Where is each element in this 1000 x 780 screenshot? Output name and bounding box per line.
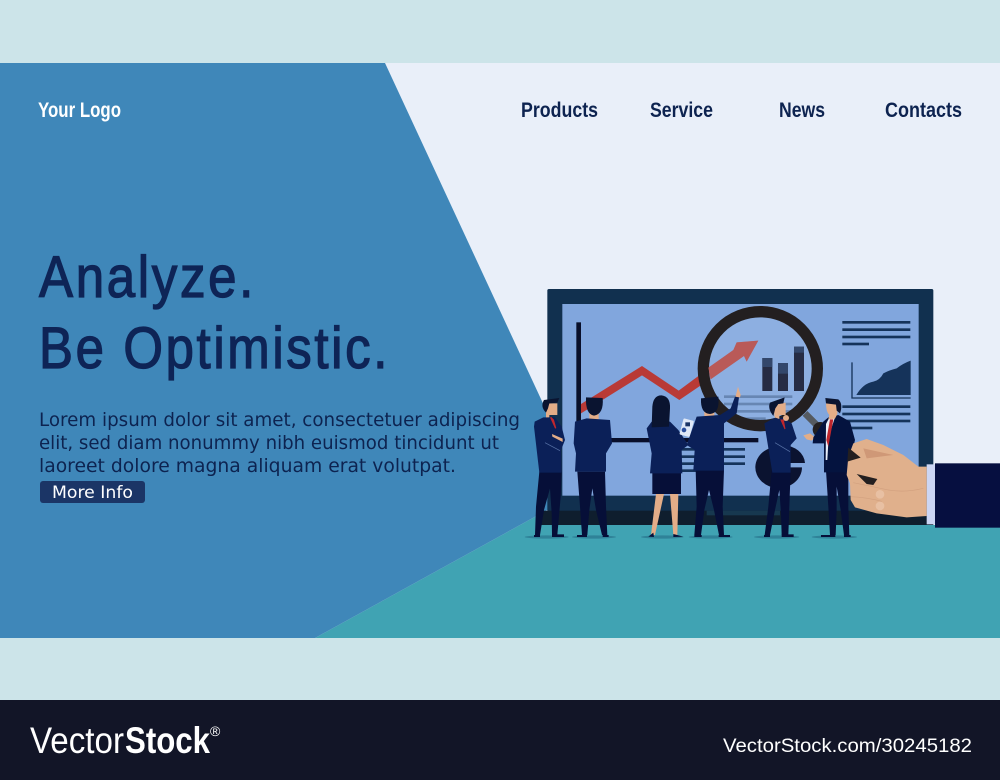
- illustration: [525, 289, 1000, 539]
- body paragraph: Lorem ipsum dolor sit amet, consectetuer adipiscing: [39, 409, 520, 431]
- area chart: [852, 361, 911, 398]
- navigation menu: Products: [521, 98, 598, 122]
- body paragraph: laoreet dolore magna aliquam erat volutpat.: [39, 455, 456, 477]
- text lines lower: [680, 448, 745, 472]
- headline: Analyze.: [39, 245, 256, 310]
- text lines right: [842, 405, 910, 429]
- top band: [0, 0, 1000, 63]
- person 1: [525, 398, 569, 539]
- pie chart: [755, 445, 805, 488]
- bars inside lens: [762, 347, 804, 391]
- navigation menu: Contacts: [885, 98, 962, 122]
- hand holding magnifier: [847, 439, 1000, 528]
- presentation monitor: [540, 289, 933, 525]
- magnifying glass: [703, 312, 828, 437]
- more info button: More Info: [52, 483, 133, 503]
- footer bar: Stock: [125, 720, 210, 761]
- text lines centre: [724, 395, 792, 420]
- more info button: [40, 481, 145, 503]
- person 4 pointing: [687, 387, 741, 539]
- bottom band: [0, 638, 1000, 700]
- footer bar: VectorStock.com/30245182: [723, 736, 972, 757]
- red trend arrow: [581, 341, 758, 413]
- body paragraph: elit, sed diam nonummy nibh euismod tincidunt ut: [39, 432, 499, 454]
- footer bar: Vector: [30, 720, 124, 761]
- navigation menu: News: [779, 98, 825, 122]
- chart axes: [576, 322, 758, 442]
- person 5: [754, 397, 799, 539]
- navigation menu: [521, 98, 962, 122]
- headline: Be Optimistic.: [39, 316, 390, 381]
- person 6: [803, 398, 857, 539]
- headline: [39, 245, 390, 381]
- footer bar: ®: [210, 723, 221, 739]
- teal floor: [315, 514, 1000, 638]
- person 3 woman with tablet: [641, 395, 694, 539]
- person 2: [572, 397, 616, 539]
- body paragraph: [39, 409, 520, 477]
- logo text: Your Logo: [38, 99, 121, 122]
- footer bar: [0, 700, 1000, 780]
- blue wedge panel: [0, 63, 560, 638]
- text lines top right: [842, 321, 910, 345]
- page panel background: [0, 63, 1000, 638]
- navigation menu: Service: [650, 98, 713, 122]
